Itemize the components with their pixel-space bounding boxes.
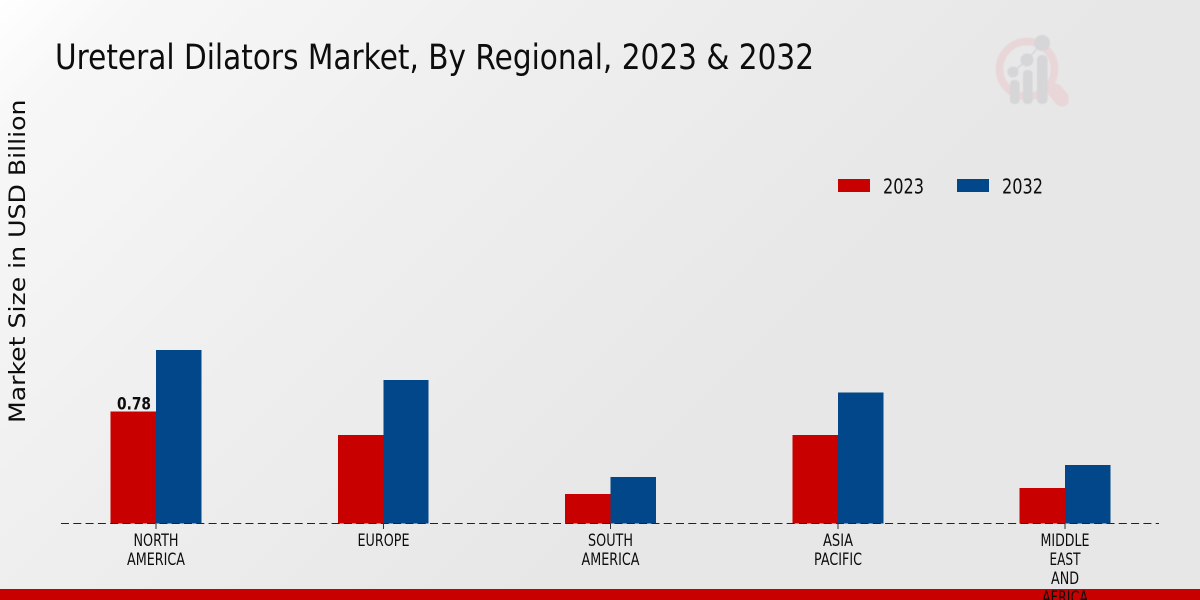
- bars: Middle East and Africa: [1020, 465, 1110, 524]
- x-axis tick marks: [156, 523, 1065, 529]
- x-axis labels: ASIA: [823, 531, 854, 550]
- x-axis labels: AMERICA: [582, 550, 640, 569]
- x-axis labels: AMERICA: [127, 550, 186, 569]
- bars: South America: [565, 477, 656, 524]
- footer bar: [0, 589, 1200, 600]
- bar chart: [61, 350, 1159, 524]
- bars: Asia Pacific: [792, 392, 884, 524]
- legend: [838, 174, 1043, 198]
- y-axis title: Market Size in USD Billion: [5, 100, 31, 423]
- x-axis labels: SOUTH: [588, 531, 633, 550]
- legend: 2023: [883, 174, 924, 198]
- title: Ureteral Dilators Market, By Regional, 2023 & 2032: [55, 38, 814, 78]
- x-axis labels: NORTH: [134, 531, 178, 550]
- x-axis labels: EAST: [1050, 550, 1081, 569]
- bars: North America: [110, 350, 202, 524]
- axis baseline: [61, 522, 1159, 524]
- x-axis labels: [127, 531, 1090, 600]
- x-axis labels: EUROPE: [358, 531, 410, 550]
- x-axis labels: AND: [1051, 569, 1079, 588]
- watermark logo: [1000, 35, 1062, 104]
- x-axis labels: PACIFIC: [814, 550, 862, 569]
- bars: Europe: [338, 380, 428, 524]
- x-axis labels: MIDDLE: [1040, 531, 1090, 550]
- legend: 2032: [1002, 174, 1043, 198]
- value label: 0.78: [117, 394, 151, 414]
